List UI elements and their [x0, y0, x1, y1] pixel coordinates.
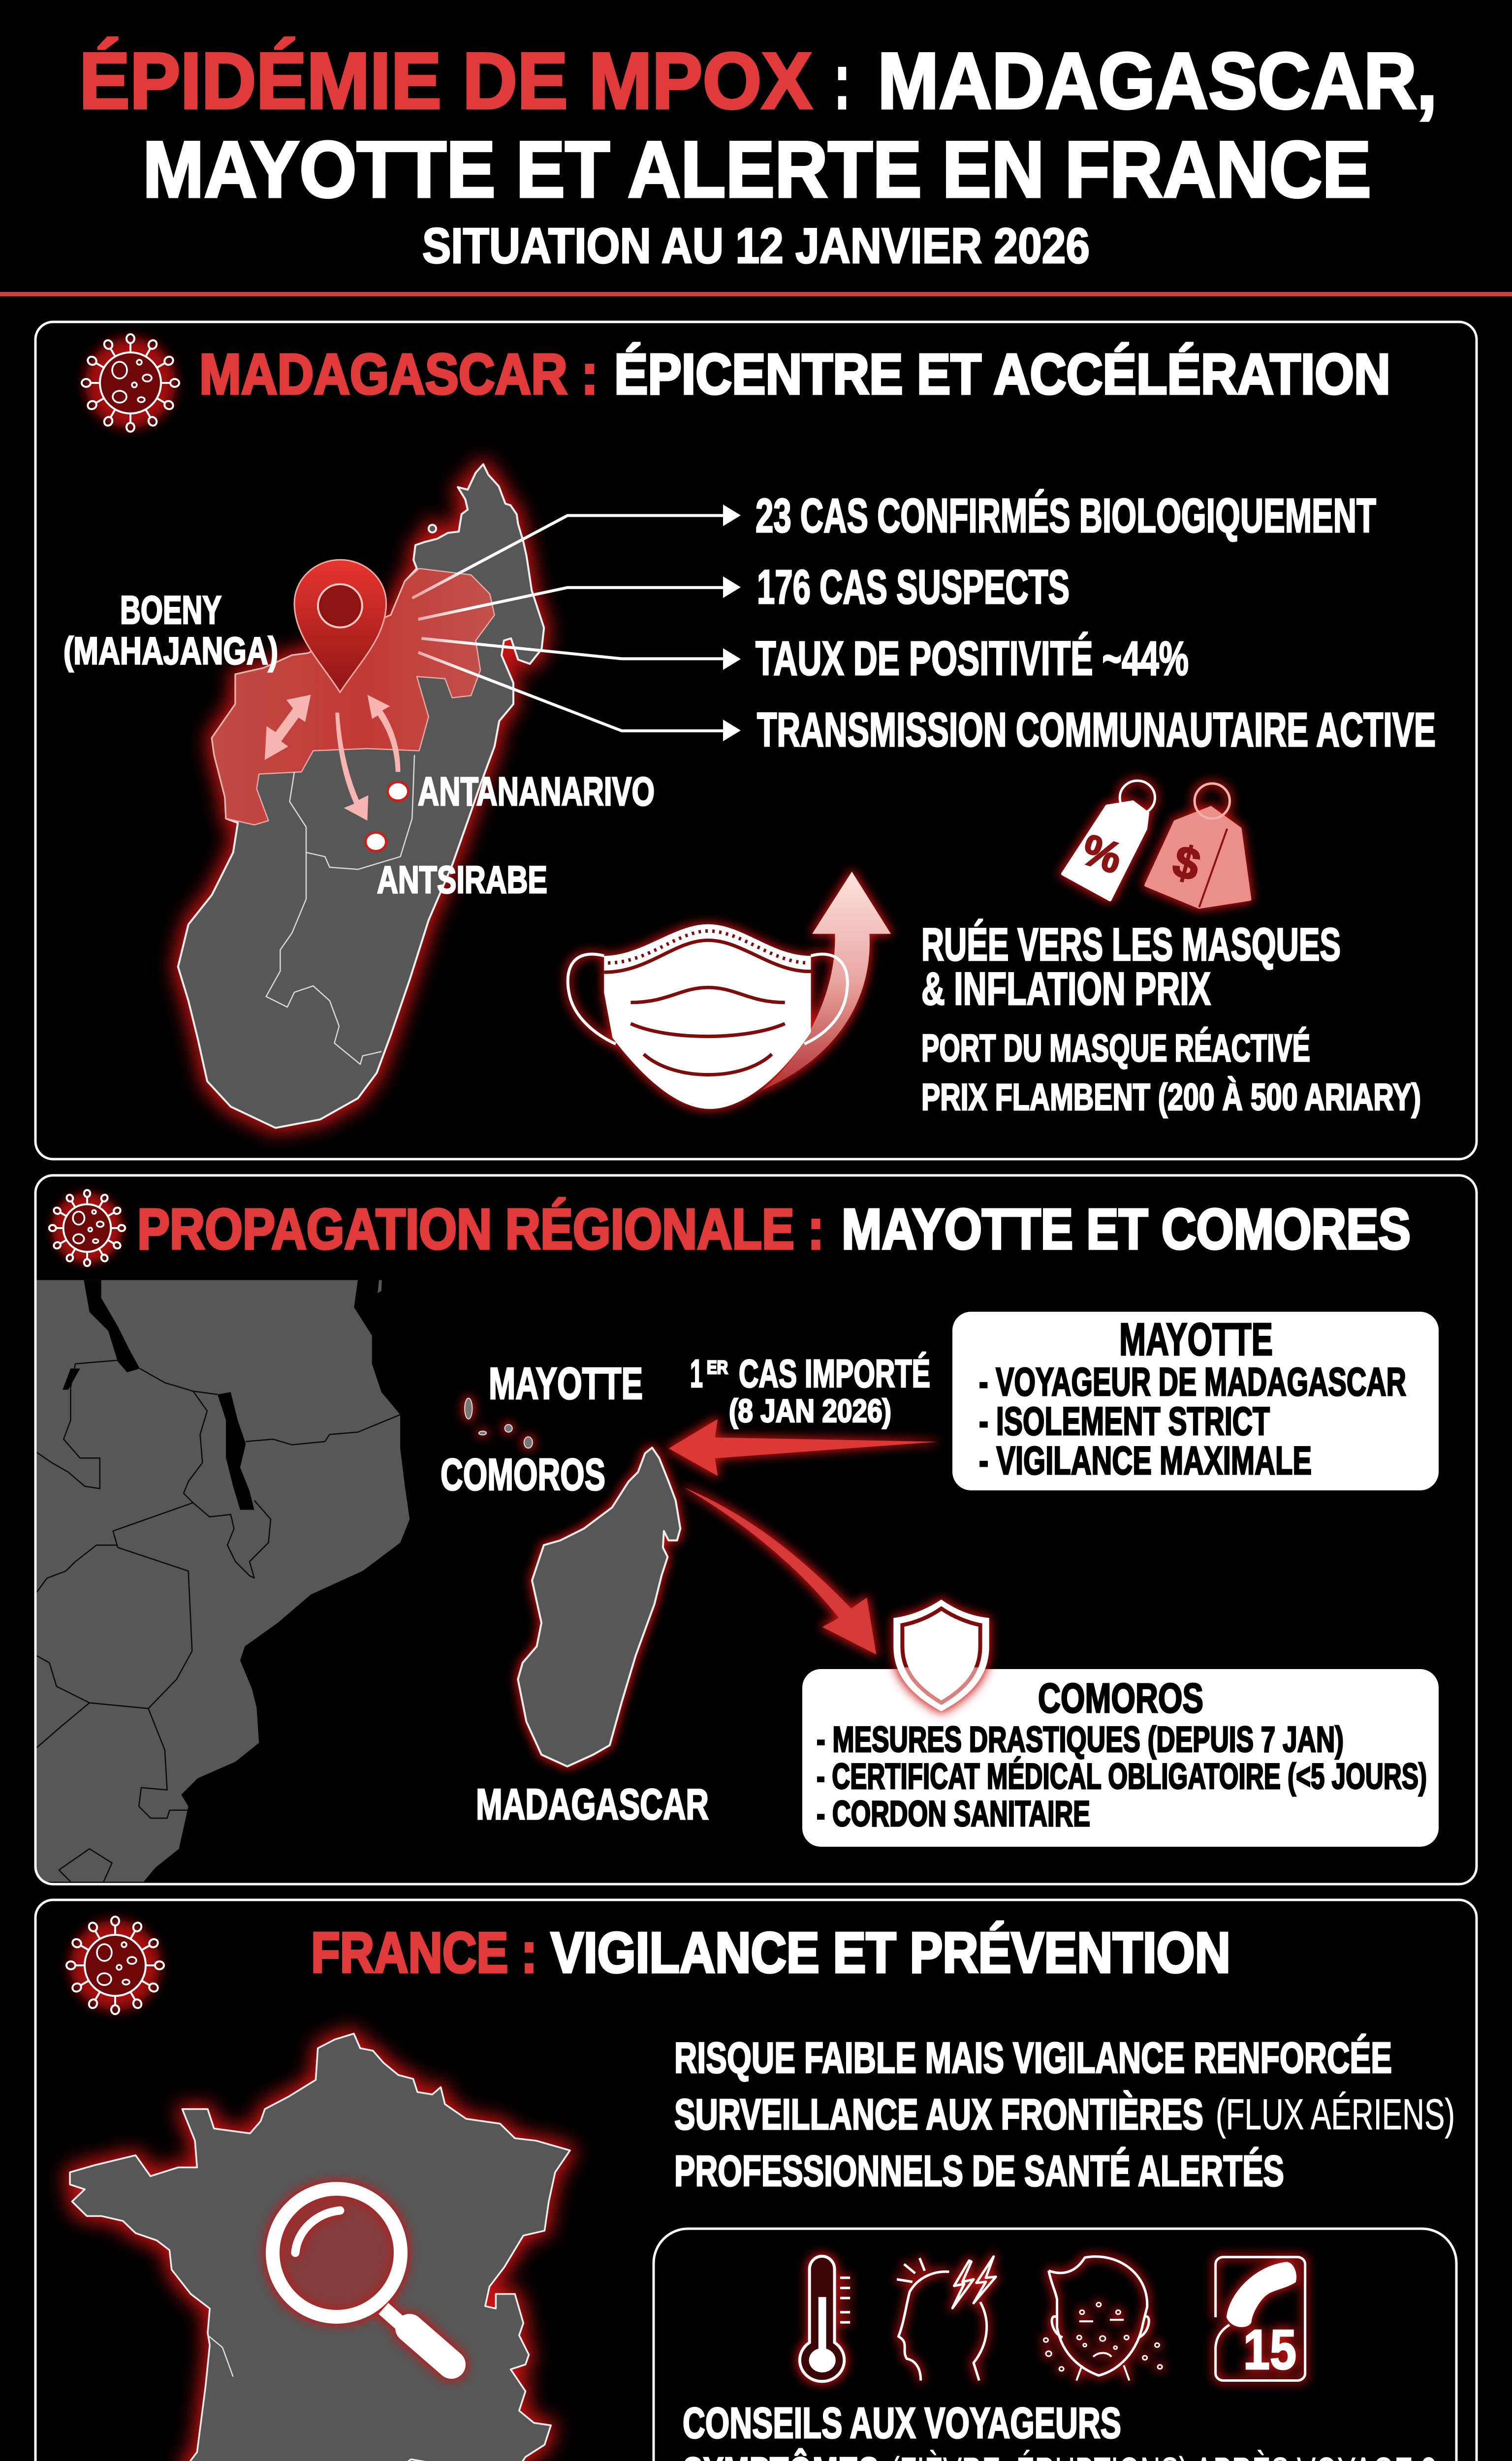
heading: Madagascar: MADAGASCAR :	[199, 342, 598, 406]
text block: masks and prices	[921, 918, 1421, 1118]
city dots	[366, 782, 409, 851]
box: Comoros	[802, 1669, 1439, 1847]
map labels: (MAHAJANGA)	[63, 629, 278, 672]
title: :	[834, 36, 850, 126]
icon: price tags: $	[1168, 836, 1205, 891]
map labels: MADAGASCAR	[476, 1780, 709, 1829]
icon: rash face	[1043, 2257, 1162, 2380]
map labels: ANTSIRABE	[377, 858, 547, 901]
icon: magnifying glass	[273, 2189, 451, 2365]
box: Comoros: - CORDON SANITAIRE	[817, 1794, 1090, 1834]
callout: first imported case: 1	[690, 1352, 703, 1395]
icon: price tags	[1063, 781, 1250, 907]
text block: French response: PROFESSIONNELS DE SANTÉ ALERTÉS	[674, 2146, 1284, 2195]
map labels	[63, 588, 655, 901]
heading: Madagascar: ÉPICENTRE ET ACCÉLÉRATION	[614, 342, 1390, 406]
key figures list: TAUX DE POSITIVITÉ ~44%	[756, 631, 1189, 685]
icon: mask with rising arrow	[568, 872, 891, 1109]
panel edge over map	[35, 1193, 207, 1884]
heading: regional: MAYOTTE ET COMORES	[842, 1197, 1411, 1261]
arrow: Madagascar to Mayotte	[669, 1419, 938, 1476]
text: advice	[683, 2398, 1436, 2461]
title	[79, 36, 1437, 214]
callout: first imported case: (8 JAN 2026)	[729, 1392, 891, 1429]
icon: emergency phone 15	[1216, 2257, 1305, 2381]
icon: virus	[66, 1917, 164, 2014]
icon: virus	[49, 1190, 125, 1266]
box: Mayotte: - ISOLEMENT STRICT	[979, 1399, 1270, 1444]
map labels: BOENY	[120, 588, 221, 632]
heading: Madagascar	[199, 342, 1390, 406]
box: travellers advice	[654, 2229, 1456, 2461]
box: Mayotte: - VIGILANCE MAXIMALE	[979, 1439, 1312, 1483]
map labels: ANTANANARIVO	[418, 769, 655, 814]
text block: French response: SURVEILLANCE AUX FRONTIÈRES	[674, 2090, 1203, 2139]
key figures list	[756, 489, 1436, 757]
red affected region	[212, 568, 495, 825]
icon: shield	[893, 1600, 989, 1711]
text block: masks and prices: & INFLATION PRIX	[921, 963, 1211, 1014]
icon: headache	[897, 2257, 996, 2380]
icon: price tags: %	[1076, 824, 1128, 883]
callout: first imported case: CAS IMPORTÉ	[739, 1352, 930, 1395]
heading: France	[311, 1921, 1230, 1985]
heading: regional	[137, 1197, 1411, 1261]
subtitle: date: SITUATION AU 12 JANVIER 2026	[422, 219, 1090, 274]
map labels	[441, 1359, 709, 1829]
map labels: MAYOTTE	[489, 1359, 643, 1409]
title: ÉPIDÉMIE DE MPOX	[79, 36, 812, 126]
icon: virus	[82, 334, 179, 432]
heading: regional: PROPAGATION RÉGIONALE :	[137, 1197, 824, 1261]
map labels: COMOROS	[441, 1450, 605, 1500]
arrowheads	[723, 505, 741, 741]
box: Mayotte	[952, 1312, 1439, 1490]
icon: emergency phone 15: 15	[1243, 2319, 1296, 2381]
title: MADAGASCAR,	[878, 36, 1437, 126]
panel: France	[35, 1900, 1477, 2461]
arrows: local spread	[265, 695, 400, 820]
text: advice: CONSEILS AUX VOYAGEURS	[683, 2398, 1121, 2447]
text block: masks and prices: PORT DU MASQUE RÉACTIVÉ	[921, 1026, 1310, 1070]
icon: map pin	[294, 560, 386, 692]
map: France	[70, 2034, 625, 2461]
heading: France: VIGILANCE ET PRÉVENTION	[551, 1921, 1230, 1985]
text block: French response	[674, 2033, 1455, 2195]
callout connector lines	[412, 515, 725, 731]
icon: thermometer	[800, 2256, 850, 2381]
box: Comoros: COMOROS	[1038, 1675, 1203, 1721]
arrow: Madagascar to Comoros	[684, 1488, 876, 1654]
map: Madagascar with Boeny region	[178, 464, 725, 1128]
panel: regional spread	[35, 1175, 1477, 1884]
callout: first imported case: ER	[707, 1357, 728, 1378]
callout: first imported case	[690, 1352, 930, 1429]
heading: France: FRANCE :	[311, 1921, 537, 1985]
box: Mayotte: MAYOTTE	[1119, 1314, 1273, 1365]
key figures list: 176 CAS SUSPECTS	[757, 560, 1070, 614]
map: small Madagascar and Comoros	[465, 1398, 680, 1767]
title: MAYOTTE ET ALERTE EN FRANCE	[143, 125, 1371, 214]
map: East Africa	[37, 1280, 410, 1882]
panel: Madagascar	[35, 322, 1477, 1159]
